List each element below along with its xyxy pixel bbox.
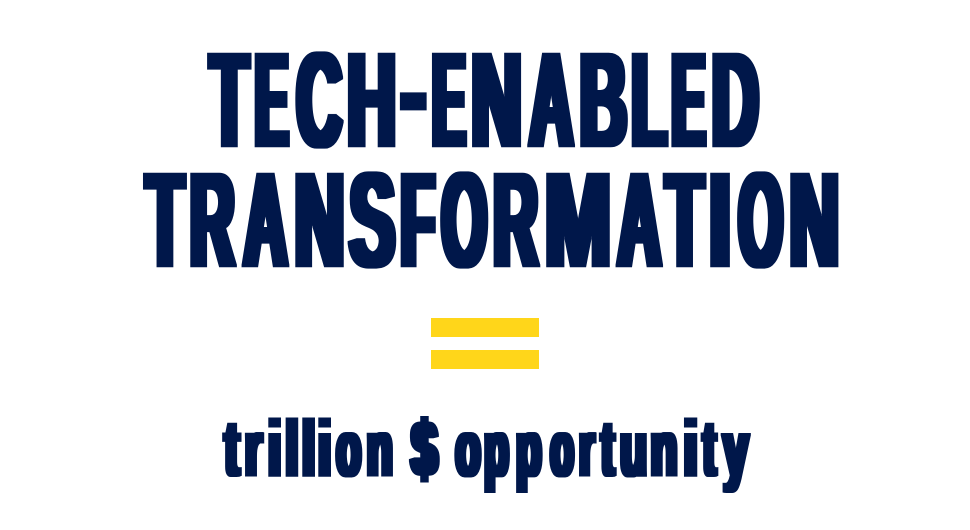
title line 2: T xyxy=(666,144,703,295)
title line 1: E xyxy=(672,24,705,175)
tagline: r xyxy=(245,405,262,493)
tagline: t xyxy=(601,405,614,493)
tagline: u xyxy=(620,405,647,493)
tagline: i xyxy=(268,405,282,493)
tagline: n xyxy=(651,405,677,493)
tagline: t xyxy=(225,405,239,493)
tagline: r xyxy=(579,405,594,493)
tagline: l xyxy=(302,405,316,493)
title line 2: O xyxy=(739,144,783,295)
title line 2: M xyxy=(545,144,611,295)
title line 2: O xyxy=(442,144,487,295)
tagline: o xyxy=(456,405,480,493)
tagline: p xyxy=(516,405,541,493)
title line 1: T xyxy=(210,24,248,175)
title line 1: H xyxy=(347,24,396,175)
title line 2: I xyxy=(709,144,731,295)
tagline: i xyxy=(683,405,698,493)
tagline: t xyxy=(703,405,716,493)
tagline: p xyxy=(484,405,509,493)
title line 1: L xyxy=(632,24,666,175)
title line 1: B xyxy=(580,24,627,175)
infographic: D xyxy=(712,24,758,175)
tagline: y xyxy=(723,405,748,493)
title line 2: R xyxy=(190,144,234,295)
tagline: n xyxy=(367,405,393,493)
title line 1: N xyxy=(471,24,522,175)
title line 1: E xyxy=(433,24,465,175)
equals sign xyxy=(431,318,539,369)
tagline: $ xyxy=(411,405,438,493)
title line 2: T xyxy=(146,144,184,295)
tagline: i xyxy=(318,405,332,493)
title line 1: C xyxy=(297,24,341,175)
tagline: o xyxy=(336,405,361,493)
title line 2: A xyxy=(244,144,287,295)
title line 1: E xyxy=(255,24,288,175)
title line 1: - xyxy=(401,14,426,165)
title line 2: A xyxy=(618,144,661,295)
title line 2: F xyxy=(401,144,434,295)
title line 2: S xyxy=(350,144,395,295)
tagline: o xyxy=(551,405,574,493)
title line 2: N xyxy=(790,144,839,295)
title line 2: R xyxy=(494,144,538,295)
title line 1: A xyxy=(530,24,573,175)
tagline: l xyxy=(285,405,299,493)
title line 2: N xyxy=(295,144,344,295)
